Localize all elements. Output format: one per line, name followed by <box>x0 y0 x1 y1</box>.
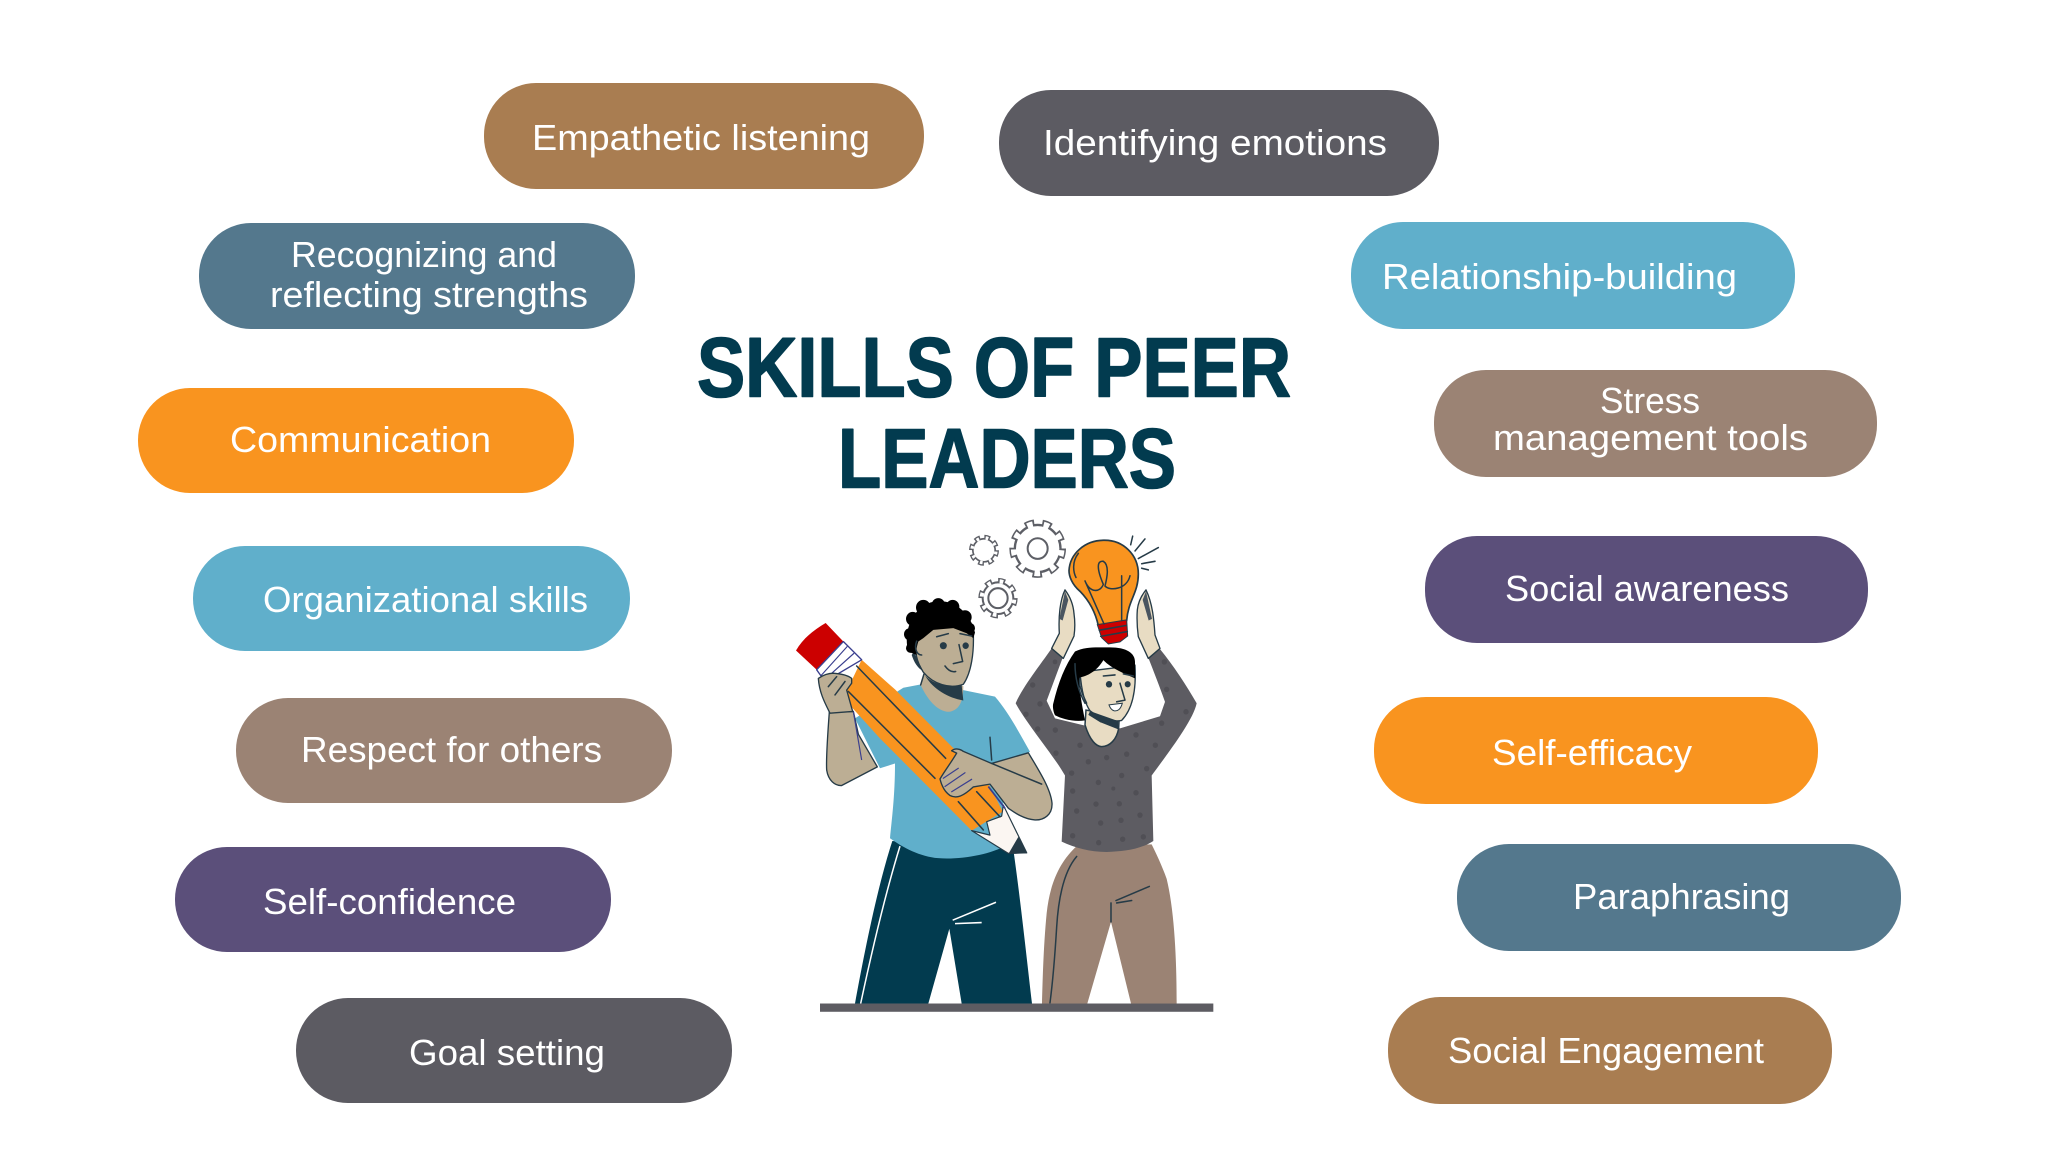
woman collar shadow <box>1088 711 1118 729</box>
pill: Identifying emotions: Identifying emotions <box>1043 122 1387 163</box>
pill: Self-efficacy: Self-efficacy <box>1492 732 1692 773</box>
pill: Empathetic listening <box>484 83 924 189</box>
man collar shadow <box>925 676 963 700</box>
pill: Self-efficacy <box>1374 697 1818 804</box>
man right arm and hand <box>940 749 1052 820</box>
title: LEADERS <box>838 412 1176 506</box>
pill: Self-confidence <box>175 847 611 952</box>
man hair <box>904 598 975 671</box>
title: SKILLS OF PEER <box>697 320 1291 414</box>
pill: Social Engagement: Social Engagement <box>1448 1030 1764 1071</box>
pill: Recognizing and reflecting strengths: Recognizing and <box>291 234 557 275</box>
pill: Social awareness <box>1425 536 1868 643</box>
man neck <box>921 674 963 712</box>
icon: lower gear <box>982 581 1014 615</box>
man trousers <box>855 841 1032 1004</box>
title <box>697 320 1291 506</box>
pill: Organizational skills <box>193 546 630 651</box>
pill: Paraphrasing: Paraphrasing <box>1573 876 1790 917</box>
man shirt <box>855 684 1030 859</box>
icon: small gear <box>972 538 996 563</box>
pill: Relationship-building <box>1351 222 1795 329</box>
pill: Communication: Communication <box>230 419 491 460</box>
man face <box>916 623 973 686</box>
pill: Social Engagement <box>1388 997 1832 1104</box>
icon: large gear <box>1014 524 1062 573</box>
pill: Stress management tools <box>1434 370 1877 477</box>
woman hair <box>1053 647 1135 721</box>
pill: Respect for others <box>236 698 672 803</box>
pill: Communication <box>138 388 574 493</box>
woman facial features <box>1075 664 1133 711</box>
man hand on pencil top <box>818 673 853 713</box>
pill: Empathetic listening: Empathetic listening <box>532 117 870 158</box>
pill: Identifying emotions <box>999 90 1439 196</box>
man facial features <box>916 634 972 672</box>
pill: Paraphrasing <box>1457 844 1901 951</box>
icon: giant pencil <box>796 623 1027 854</box>
pill: Organizational skills: Organizational skills <box>263 579 588 620</box>
woman trousers <box>1042 844 1177 1004</box>
floor bar <box>820 1004 1213 1012</box>
pill: Self-confidence: Self-confidence <box>263 881 516 922</box>
illustration: two peer leaders with pencil and light bulb <box>796 524 1213 1012</box>
pill: Stress management tools: Stress <box>1600 380 1700 421</box>
pill: Social awareness: Social awareness <box>1505 568 1789 609</box>
pill: Recognizing and reflecting strengths: reflecting strengths <box>270 274 588 315</box>
pill: Goal setting <box>296 998 732 1103</box>
figure: man <box>796 598 1052 1004</box>
pill: Recognizing and reflecting strengths <box>199 223 635 329</box>
woman neck <box>1085 710 1119 747</box>
woman sweater <box>1016 648 1197 852</box>
pill: Goal setting: Goal setting <box>409 1032 605 1073</box>
pill: Relationship-building: Relationship-building <box>1382 256 1737 297</box>
figure: woman <box>1016 590 1197 1004</box>
pill: Respect for others: Respect for others <box>301 729 602 770</box>
man left arm <box>827 711 877 786</box>
pill: Stress management tools: management tools <box>1493 417 1808 458</box>
woman face <box>1080 665 1135 721</box>
woman hands <box>1052 590 1160 658</box>
icon: light bulb <box>1069 536 1158 644</box>
